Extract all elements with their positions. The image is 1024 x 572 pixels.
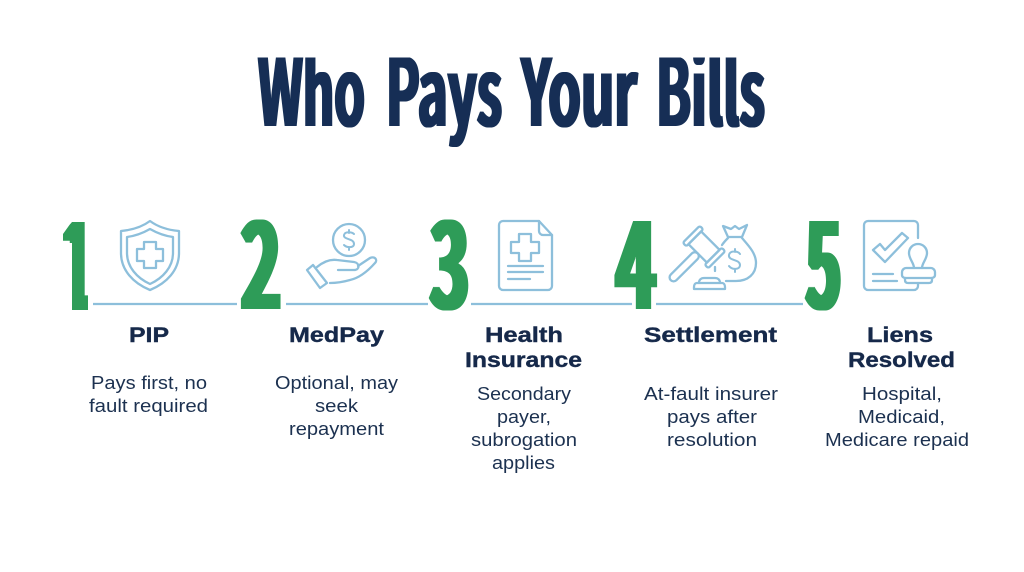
step 4: Settlement bbox=[616, 168, 803, 450]
number 2: 2 bbox=[241, 168, 281, 345]
description: subrogation bbox=[471, 429, 577, 450]
step 3: Health Insurance bbox=[430, 168, 632, 473]
title: Who bbox=[258, 18, 365, 154]
description: applies bbox=[492, 452, 555, 473]
description bbox=[471, 383, 577, 473]
description bbox=[644, 383, 778, 450]
description: Pays first, no bbox=[91, 372, 207, 393]
icon: medical document bbox=[499, 221, 552, 290]
connector line bbox=[471, 303, 632, 305]
heading: PIP: PIP bbox=[129, 323, 169, 347]
heading: Liens Resolved: Liens bbox=[867, 323, 933, 347]
description: At-fault insurer bbox=[644, 383, 778, 404]
heading: Liens Resolved bbox=[848, 323, 955, 372]
description bbox=[825, 383, 969, 450]
description: Secondary bbox=[477, 383, 572, 404]
heading: Settlement: Settlement bbox=[644, 323, 777, 347]
description: Hospital, bbox=[862, 383, 942, 404]
number 3: 3 bbox=[430, 168, 469, 345]
description: payer, bbox=[497, 406, 551, 427]
step 1: PIP bbox=[63, 220, 237, 416]
step 5: Liens Resolved bbox=[806, 168, 969, 450]
icon: hand holding coin bbox=[307, 224, 376, 288]
description: resolution bbox=[667, 429, 757, 450]
step 2: MedPay bbox=[241, 168, 428, 439]
title bbox=[258, 58, 765, 147]
description: Medicare repaid bbox=[825, 429, 969, 450]
heading: Liens Resolved: Resolved bbox=[848, 348, 955, 372]
description: pays after bbox=[667, 406, 757, 427]
description: fault required bbox=[89, 395, 208, 416]
title: Bills bbox=[656, 18, 765, 154]
description: Optional, may bbox=[275, 372, 399, 393]
description: seek bbox=[315, 395, 359, 416]
title: Your bbox=[520, 18, 638, 154]
icon: gavel and money bag bbox=[658, 225, 756, 293]
heading: MedPay: MedPay bbox=[289, 323, 384, 347]
description: Medicaid, bbox=[858, 406, 945, 427]
heading: Health Insurance bbox=[465, 323, 582, 372]
description bbox=[275, 372, 399, 439]
step 5: Liens Resolved: 5 bbox=[806, 168, 841, 345]
number 4: 4 bbox=[616, 168, 656, 345]
connector line bbox=[93, 303, 237, 305]
connector line bbox=[286, 303, 428, 305]
number 1: 1 bbox=[58, 169, 94, 346]
icon: shield with medical cross bbox=[121, 221, 179, 290]
description: repayment bbox=[289, 418, 384, 439]
connector line bbox=[656, 303, 803, 305]
description bbox=[89, 372, 208, 416]
title: Pays bbox=[386, 18, 502, 154]
heading: Health Insurance: Health bbox=[485, 323, 563, 347]
icon: approved document and stamp bbox=[864, 221, 935, 290]
heading: Health Insurance: Insurance bbox=[465, 348, 582, 372]
